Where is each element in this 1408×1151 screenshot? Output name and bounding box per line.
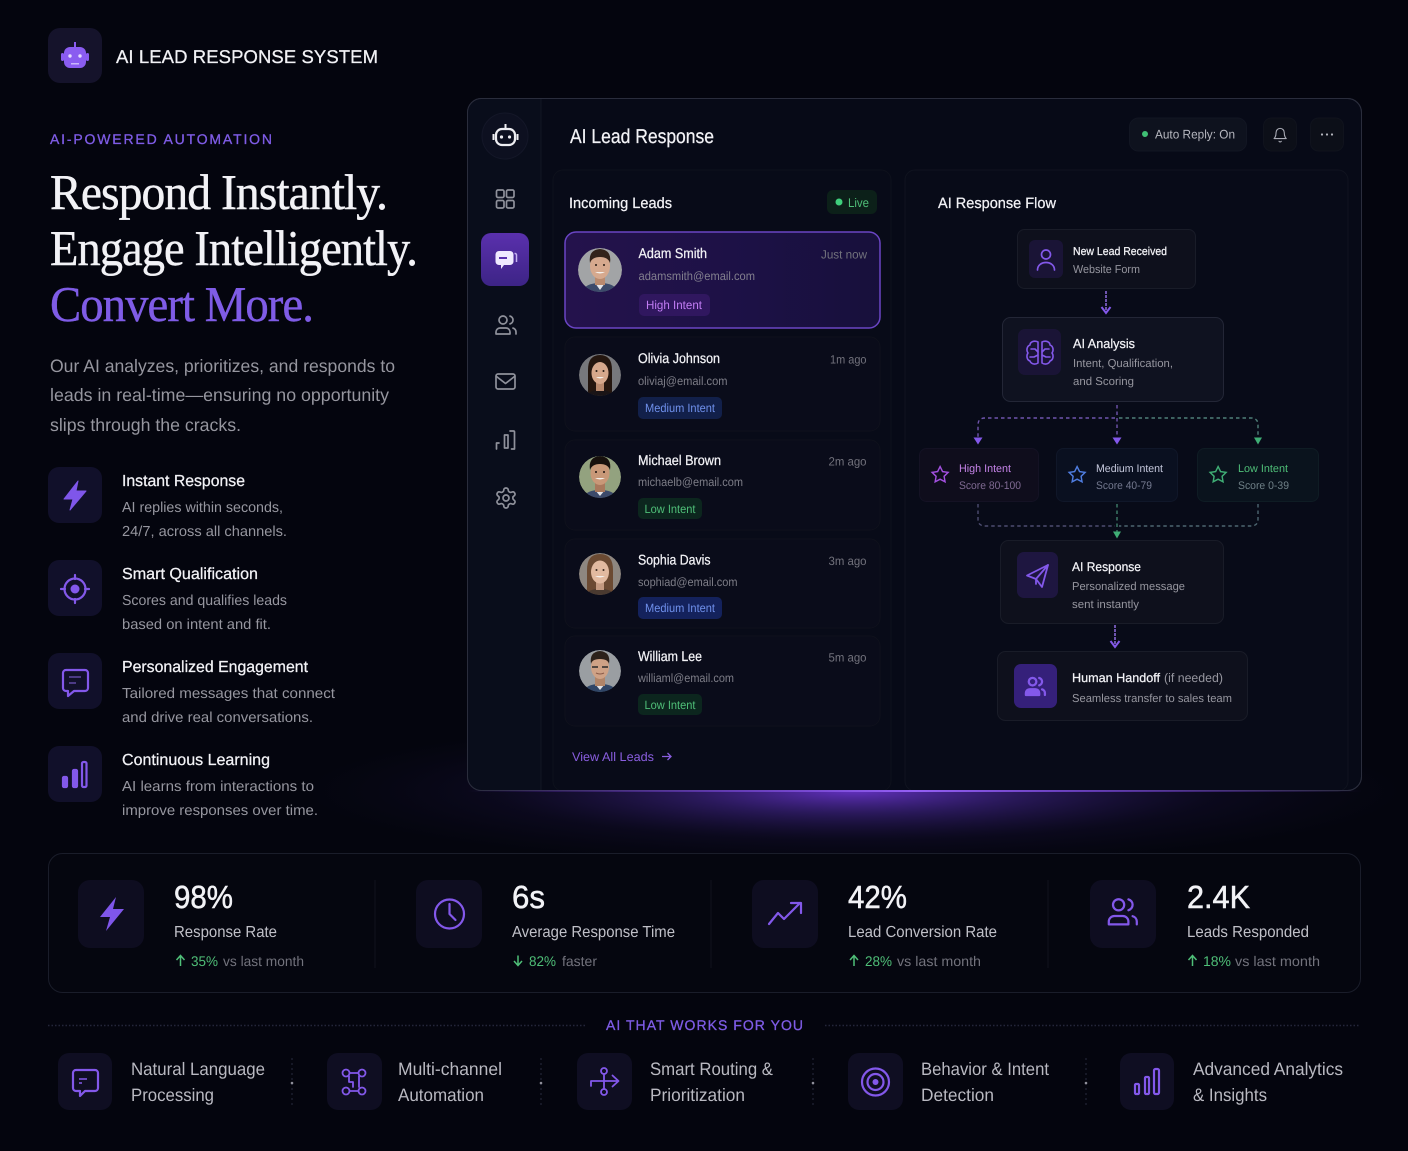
lead card: Sophia Davis: sophiad@email.com	[638, 575, 738, 589]
dashboard top bar: AI Lead Response	[570, 126, 714, 148]
stat: lead conversion rate: 28%	[865, 953, 892, 969]
intro paragraph: Our AI analyzes, prioritizes, and responds to	[50, 356, 395, 376]
feature: instant response: AI replies within seconds,	[122, 500, 283, 516]
feature list	[48, 467, 335, 819]
stat: average response time: 6s	[512, 879, 545, 915]
feature: personalized engagement	[48, 653, 335, 726]
panel: AI response flow	[905, 170, 1348, 791]
lead card: William Lee: williaml@email.com	[637, 671, 734, 685]
icon: bell	[1264, 118, 1296, 151]
tag: medium intent	[638, 597, 722, 619]
node: AI response	[1000, 540, 1224, 624]
node: new lead received: New Lead Received	[1073, 246, 1167, 258]
lead card: Sophia Davis: Sophia Davis	[638, 552, 710, 568]
feature: personalized engagement: and drive real conversations.	[122, 710, 313, 726]
avatar: Olivia	[579, 354, 621, 398]
lead card: Michael Brown: michaelb@email.com	[638, 475, 743, 489]
node: medium intent: Score 40-79	[1096, 480, 1152, 492]
headline	[50, 164, 417, 332]
stat: average response time: 82%	[529, 953, 556, 969]
avatar: Michael	[579, 456, 621, 499]
node: human handoff: Human Handoff	[1072, 671, 1161, 685]
lead card: William Lee: William Lee	[638, 648, 702, 664]
stat: average response time: Average Response Time	[512, 924, 675, 941]
lead card: William Lee: 5m ago	[828, 650, 867, 664]
auto reply status: Auto Reply: On	[1155, 128, 1235, 142]
stat: response rate: 35%	[191, 953, 218, 969]
capability: multi-channel automation	[327, 1053, 502, 1110]
icon: active chat tab	[481, 233, 529, 286]
capability: natural language processing: Processing	[131, 1085, 214, 1105]
stat: response rate: Response Rate	[174, 924, 277, 941]
feature: continuous learning: improve responses over time.	[122, 803, 318, 819]
headline: Convert More.	[50, 276, 313, 332]
feature: smart qualification	[48, 560, 287, 633]
capability: smart routing and prioritization: Smart Routing &	[650, 1059, 773, 1079]
tag: low intent	[638, 694, 702, 715]
live badge	[827, 190, 877, 214]
stat: leads responded	[1090, 879, 1320, 969]
node: medium intent: Medium Intent	[1096, 463, 1163, 475]
hero text block	[50, 131, 417, 435]
panel: stats	[48, 854, 1360, 992]
tag: medium intent: Medium Intent	[645, 601, 716, 615]
eyebrow: AI-POWERED AUTOMATION	[50, 131, 272, 147]
tag: low intent: Low Intent	[644, 502, 696, 516]
feature: personalized engagement: Personalized Engagement	[122, 659, 309, 676]
icon: bars	[496, 431, 514, 449]
arrow	[1102, 291, 1110, 313]
auto reply status	[1130, 118, 1246, 151]
capability: natural language processing: Natural Language	[131, 1059, 265, 1079]
headline: Respond Instantly.	[50, 164, 387, 220]
lead card: Adam Smith: adamsmith@email.com	[638, 269, 755, 283]
avatar: William	[579, 650, 621, 693]
header: logo and system name	[48, 28, 378, 83]
icon: robot logo	[48, 28, 102, 83]
live badge: Live	[848, 196, 869, 210]
view all leads link: View All Leads	[572, 750, 654, 764]
feature: personalized engagement: Tailored messages that connect	[122, 686, 335, 702]
lead card: Olivia Johnson: 1m ago	[830, 352, 867, 366]
tag: high intent: High Intent	[646, 298, 703, 312]
node: new lead received	[1018, 230, 1196, 288]
stat: response rate: 98%	[174, 879, 233, 915]
feature: instant response: 24/7, across all channels.	[122, 524, 287, 540]
lead card: Olivia Johnson	[579, 352, 866, 419]
capability: smart routing and prioritization: Prioritization	[650, 1085, 745, 1105]
feature: continuous learning	[48, 746, 318, 819]
node: high intent: High Intent	[959, 463, 1011, 475]
lead card: Michael Brown: 2m ago	[828, 454, 867, 468]
icon: settings	[497, 488, 515, 508]
node: AI analysis	[1002, 318, 1224, 402]
lead card: Michael Brown	[579, 454, 866, 519]
feature: continuous learning: Continuous Learning	[122, 752, 270, 769]
stat: lead conversion rate	[752, 879, 997, 969]
feature: smart qualification: Smart Qualification	[122, 566, 258, 583]
stat: average response time: faster	[562, 953, 597, 969]
icon: mail	[496, 374, 515, 389]
icon: grid	[496, 190, 514, 208]
node: high intent: Score 80-100	[959, 480, 1021, 492]
node: low intent	[1198, 448, 1318, 502]
lead card: William Lee	[579, 650, 866, 715]
stat: leads responded: vs last month	[1235, 953, 1320, 969]
merging connectors to AI response	[978, 504, 1258, 538]
lead card: Sophia Davis: 3m ago	[828, 554, 867, 568]
stat: leads responded: 18%	[1203, 953, 1231, 969]
stat: response rate	[78, 879, 304, 969]
intro paragraph: leads in real-time—ensuring no opportunity	[50, 385, 389, 405]
capability: behavior and intent detection: Behavior & Intent	[921, 1059, 1049, 1079]
stat: response rate: vs last month	[223, 953, 304, 969]
node: AI analysis: AI Analysis	[1073, 336, 1135, 351]
stat: leads responded: Leads Responded	[1187, 924, 1309, 941]
feature: instant response	[48, 467, 287, 540]
capability: advanced analytics and insights: & Insights	[1193, 1085, 1267, 1105]
tag: low intent: Low Intent	[644, 698, 696, 712]
capability: multi-channel automation: Multi-channel	[398, 1059, 502, 1079]
node: AI analysis: Intent, Qualification,	[1073, 358, 1173, 370]
capability: behavior and intent detection	[848, 1053, 1049, 1110]
icon: more menu	[1310, 118, 1344, 151]
branching connectors to intent cards	[974, 405, 1262, 444]
stat: average response time	[416, 879, 675, 969]
headline: Engage Intelligently.	[50, 220, 417, 276]
lead card: Olivia Johnson: Olivia Johnson	[638, 350, 720, 366]
tag: low intent	[638, 498, 702, 519]
node: high intent	[920, 448, 1038, 502]
node: human handoff: (if needed)	[1164, 671, 1223, 685]
stat: leads responded: 2.4K	[1187, 879, 1250, 915]
capability: advanced analytics and insights	[1120, 1053, 1343, 1110]
capability: advanced analytics and insights: Advanced Analytics	[1193, 1059, 1343, 1079]
capability: behavior and intent detection: Detection	[921, 1085, 994, 1105]
panel: incoming leads: Incoming Leads	[569, 195, 672, 212]
lead card: Olivia Johnson: oliviaj@email.com	[638, 374, 728, 388]
lead card: Adam Smith	[565, 232, 880, 328]
node: low intent: Low Intent	[1238, 463, 1288, 475]
capability: multi-channel automation: Automation	[398, 1085, 484, 1105]
stat: lead conversion rate: 42%	[848, 879, 907, 915]
feature: continuous learning: AI learns from interactions to	[122, 779, 314, 795]
system name: AI LEAD RESPONSE SYSTEM	[116, 46, 378, 67]
node: new lead received: Website Form	[1073, 264, 1140, 276]
panel: AI response flow: AI Response Flow	[938, 195, 1056, 212]
panel: incoming leads	[553, 170, 891, 791]
glowing bottom edge	[467, 790, 1362, 792]
tag: medium intent	[638, 397, 722, 419]
tag: high intent	[639, 294, 710, 316]
stat: lead conversion rate: vs last month	[897, 953, 981, 969]
panel: dashboard	[468, 98, 1362, 791]
lead card: Adam Smith: Just now	[821, 248, 867, 262]
intro paragraph: slips through the cracks.	[50, 415, 241, 435]
node: AI response: sent instantly	[1072, 599, 1139, 611]
feature: instant response: Instant Response	[122, 473, 245, 490]
lead card: Michael Brown: Michael Brown	[638, 452, 721, 468]
avatar: Adam	[578, 248, 622, 293]
node: human handoff: Seamless transfer to sales team	[1072, 693, 1232, 705]
capability: smart routing and prioritization	[577, 1053, 773, 1110]
node: AI analysis: and Scoring	[1073, 376, 1134, 388]
icon: robot avatar	[482, 113, 528, 159]
avatar: Sophia	[579, 553, 621, 596]
lead card: Adam Smith: Adam Smith	[638, 245, 707, 261]
tag: medium intent: Medium Intent	[645, 401, 716, 415]
icon: users	[496, 316, 516, 334]
intro paragraph	[50, 356, 395, 435]
feature: smart qualification: Scores and qualifies leads	[122, 593, 287, 609]
sidebar	[468, 99, 541, 790]
lead card: Sophia Davis	[579, 553, 866, 619]
stat: lead conversion rate: Lead Conversion Rate	[848, 924, 997, 941]
node: low intent: Score 0-39	[1238, 480, 1289, 492]
icon: brain	[1027, 341, 1053, 364]
section heading: AI that works for you: AI THAT WORKS FOR YOU	[606, 1017, 803, 1033]
arrow	[1110, 625, 1120, 647]
node: AI response: AI Response	[1072, 560, 1141, 574]
glow under dashboard	[300, 716, 1408, 866]
feature: smart qualification: based on intent and fit.	[122, 617, 271, 633]
capability row	[58, 1053, 1343, 1110]
dashboard top bar	[570, 118, 1344, 151]
node: medium intent	[1056, 448, 1178, 502]
node: AI response: Personalized message	[1072, 581, 1185, 593]
node: human handoff	[998, 652, 1248, 720]
capability: natural language processing	[58, 1053, 265, 1110]
